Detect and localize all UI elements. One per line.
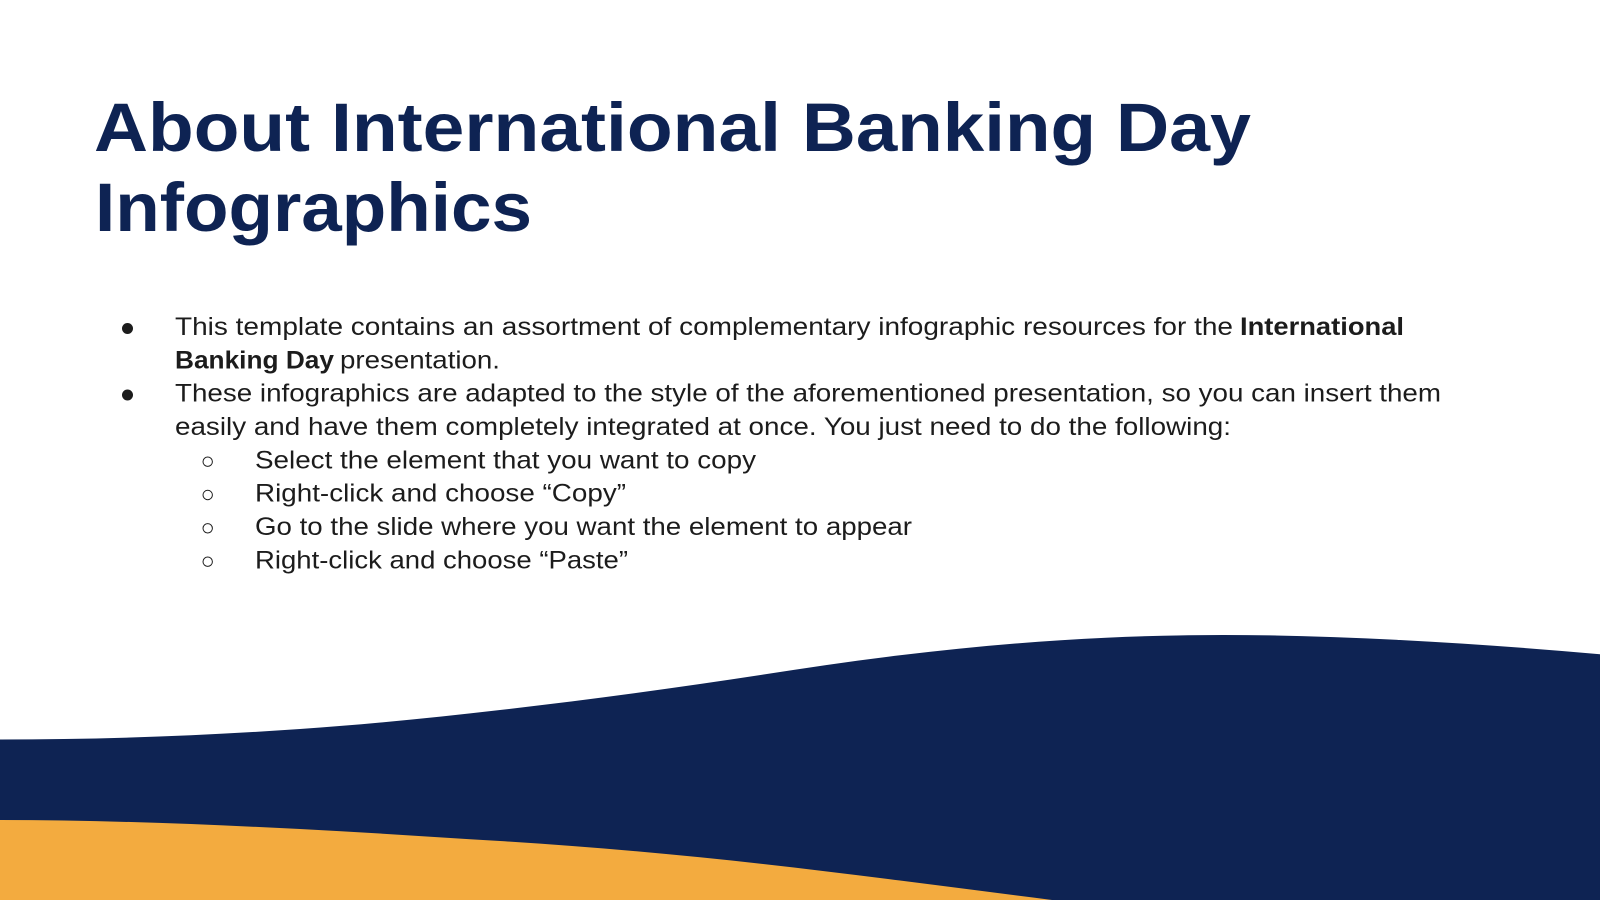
title: Day [1116, 89, 1251, 166]
title: About [94, 89, 310, 166]
sub-bullet: select: Select the element that you want to copy [255, 446, 757, 474]
bullet item: adapted style: These infographics are adapted to the style of the aforementioned presentation, so you can insert them [175, 380, 1441, 408]
bullet item: template contents: International [1240, 313, 1404, 341]
sub-bullet: paste: Right-click and choose “Paste” [255, 546, 628, 574]
title: Infographics [95, 169, 532, 246]
bullet item: template contents: presentation. [340, 346, 500, 374]
sub-bullet: go to slide: Go to the slide where you want the element to appear [255, 513, 912, 541]
bullet item: adapted style: easily and have them completely integrated at once. You just need to do the following: [175, 413, 1231, 441]
orange wave [0, 820, 1052, 900]
bulleted text block [122, 313, 1441, 574]
navy wave background [0, 635, 1600, 900]
bullet item: template contents: This template contains an assortment of complementary infographic resources for the [175, 313, 1233, 341]
title: Banking [802, 89, 1096, 166]
title: International [331, 89, 781, 166]
title [94, 89, 1251, 246]
bullet item: template contents: Banking Day [175, 346, 334, 374]
bullet item: template contents [122, 313, 1404, 374]
sub-bullet: copy: Right-click and choose “Copy” [255, 480, 626, 508]
bullet item: adapted style [122, 380, 1441, 441]
